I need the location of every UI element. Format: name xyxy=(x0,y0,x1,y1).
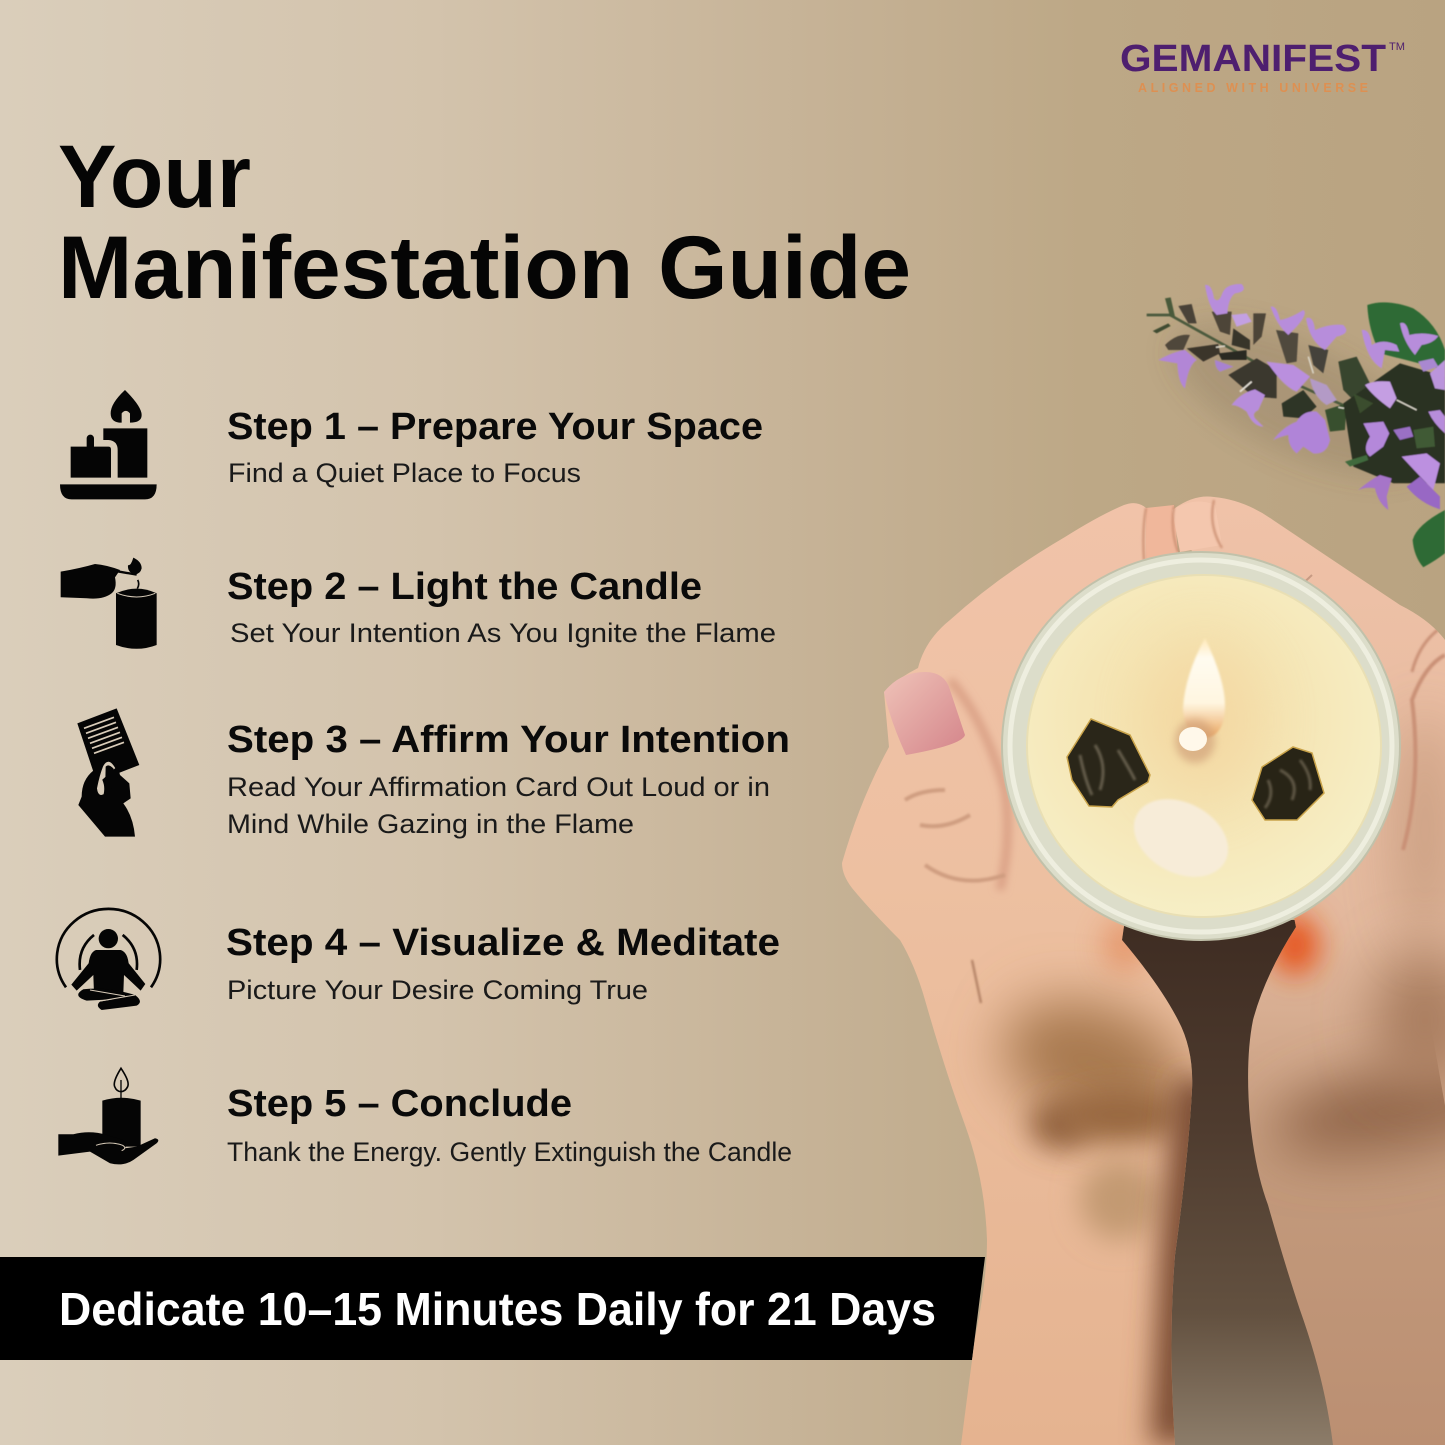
sprig shadow xyxy=(1150,291,1445,509)
title xyxy=(58,126,911,317)
step 1: heading and text: Step 1 – Prepare Your Space xyxy=(227,406,763,448)
step 2: heading and text: Set Your Intention As You Ignite the Flame xyxy=(230,618,776,648)
wax surface xyxy=(1027,575,1381,917)
candle jar xyxy=(1002,552,1400,940)
left hand xyxy=(842,503,1205,1445)
icon: candles on tray xyxy=(60,390,157,499)
leaf: bottom xyxy=(1413,510,1445,567)
step 3: heading and text: Read Your Affirmation Card Out Loud or in xyxy=(227,772,770,802)
flame xyxy=(1183,638,1225,738)
leaf: top xyxy=(1367,302,1445,370)
glass rim xyxy=(1002,552,1400,940)
banner: Dedicate 10–15 Minutes Daily for 21 Days xyxy=(59,1283,936,1335)
icon: hand lighting candle xyxy=(61,558,157,649)
step 1: heading and text: Find a Quiet Place to Focus xyxy=(228,458,581,488)
step 5: heading and text: Step 5 – Conclude xyxy=(227,1083,572,1125)
fingertips xyxy=(1143,500,1222,565)
clear quartz stone xyxy=(1120,784,1242,892)
gap between arms xyxy=(1100,920,1360,1445)
thumb nail xyxy=(884,672,965,755)
step 3: heading and text: Mind While Gazing in the Flame xyxy=(227,809,634,839)
step 5: heading and text: Thank the Energy. Gently Extinguish the Candle xyxy=(227,1137,792,1167)
step 1: heading and text xyxy=(227,406,763,488)
sprig of purple flowers xyxy=(1147,284,1445,567)
dark stone: left xyxy=(1067,719,1150,807)
logo: ALIGNED WITH UNIVERSE xyxy=(1138,81,1368,95)
logo xyxy=(1120,38,1405,95)
right hand xyxy=(1175,496,1445,1445)
icon: hand holding candle xyxy=(58,1068,158,1164)
icon: hand holding affirmation card xyxy=(77,708,139,837)
step 4: heading and text: Picture Your Desire Coming True xyxy=(227,975,648,1005)
step 3: heading and text: Step 3 – Affirm Your Intention xyxy=(227,719,790,761)
title: Your xyxy=(58,126,251,226)
step 2: heading and text: Step 2 – Light the Candle xyxy=(227,566,702,608)
step 5: heading and text xyxy=(227,1083,792,1167)
icon: meditating figure xyxy=(57,909,160,1010)
glow xyxy=(1145,635,1265,805)
step 4: heading and text: Step 4 – Visualize & Meditate xyxy=(226,922,780,964)
wick xyxy=(1175,719,1215,763)
step 3: heading and text xyxy=(227,719,790,839)
logo: TM xyxy=(1389,41,1405,53)
step 4: heading and text xyxy=(226,922,780,1005)
banner xyxy=(0,1257,985,1360)
purple blossoms xyxy=(1158,284,1445,510)
title: Manifestation Guide xyxy=(58,217,911,317)
logo: GEMANIFEST xyxy=(1120,38,1386,80)
stems and dark buds xyxy=(1147,297,1445,483)
dark stone: right xyxy=(1252,747,1324,820)
step 2: heading and text xyxy=(227,566,776,648)
